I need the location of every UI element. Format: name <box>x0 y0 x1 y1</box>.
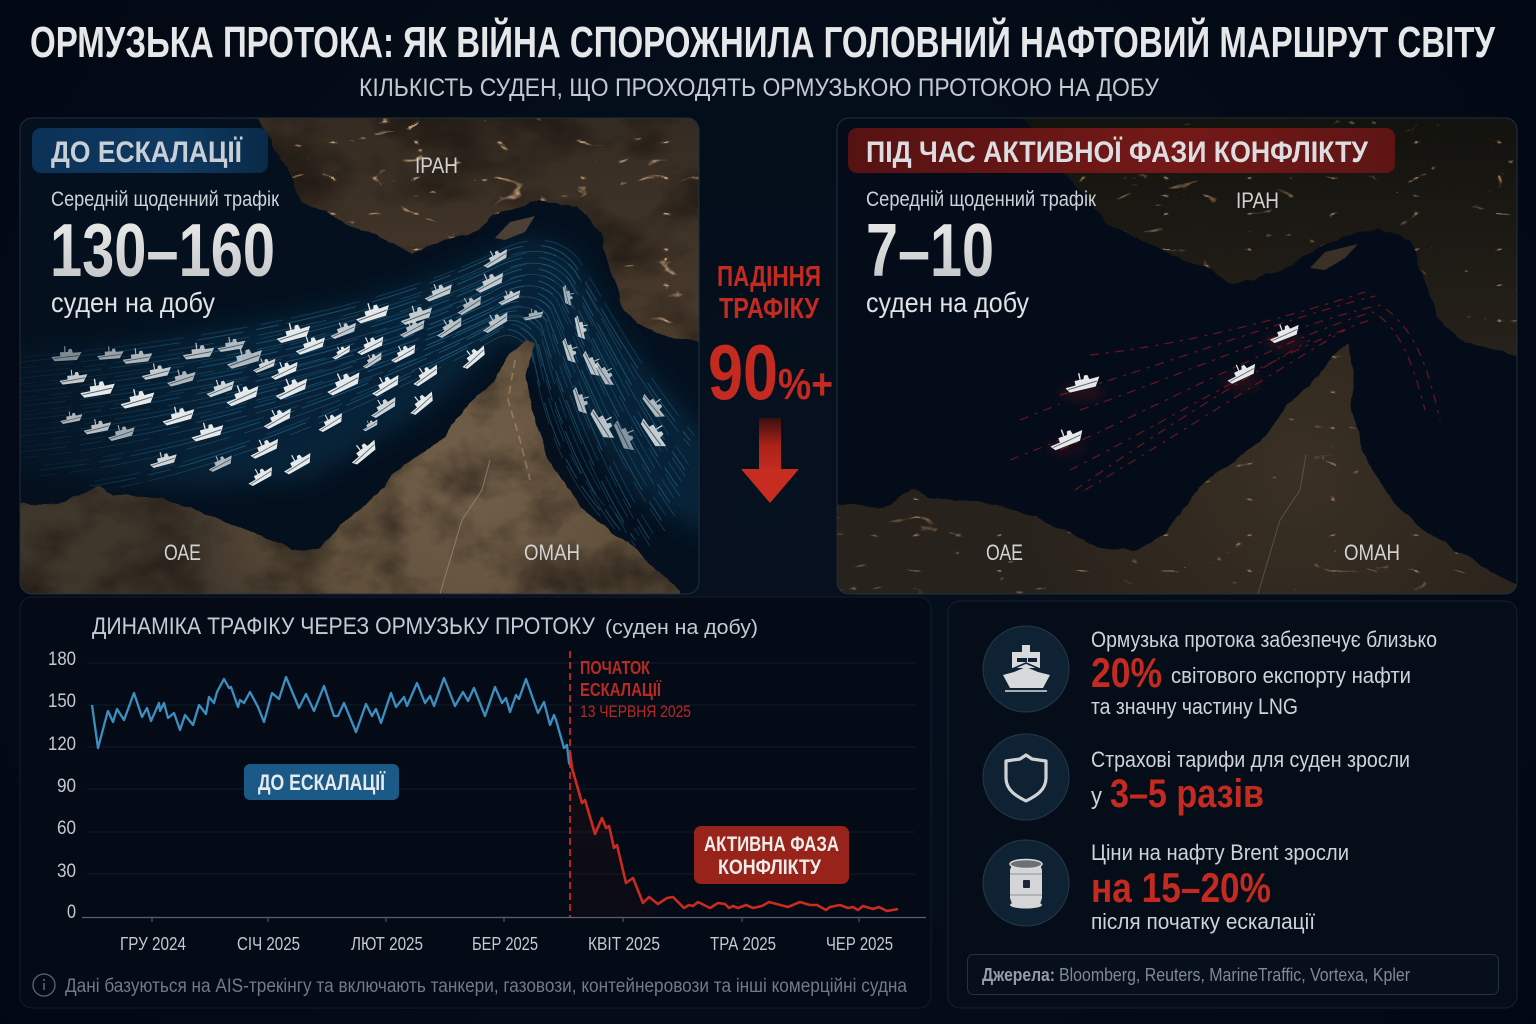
line: active phase <box>570 752 898 911</box>
fact text <box>1091 747 1410 816</box>
panel: active conflict map <box>820 110 1530 610</box>
panel: before escalation map <box>0 110 720 610</box>
map labels: ІРАН <box>1236 188 1279 213</box>
map labels <box>986 188 1400 565</box>
fact text: світового експорту нафти <box>1171 663 1411 688</box>
map labels <box>164 153 580 565</box>
stat: before escalation traffic: 130–160 <box>50 208 275 292</box>
fact text <box>1091 627 1437 719</box>
ships: dense traffic <box>51 244 673 487</box>
stat: active conflict traffic: суден на добу <box>866 287 1029 318</box>
y axis labels: 30 <box>57 861 76 882</box>
x axis labels: СІЧ 2025 <box>237 934 300 954</box>
x axis labels: БЕР 2025 <box>472 934 538 954</box>
fact text: та значну частину LNG <box>1091 694 1298 719</box>
map labels: ОМАН <box>1344 540 1400 565</box>
x axis labels <box>120 934 893 954</box>
y axis labels <box>48 649 76 923</box>
stat: active conflict traffic: Середній щоденний трафік <box>866 188 1097 211</box>
callout: traffic drop: %+ <box>778 360 833 409</box>
fact text: Ормузька протока забезпечує близько <box>1091 627 1437 652</box>
chart label: before escalation <box>244 764 399 800</box>
icon: shield <box>983 734 1069 820</box>
arrow: down <box>741 418 799 503</box>
map labels: ІРАН <box>415 153 458 178</box>
badge: before escalation: ДО ЕСКАЛАЦІЇ <box>51 136 243 169</box>
x axis labels: ГРУ 2024 <box>120 934 186 954</box>
x axis labels: ЛЮТ 2025 <box>351 934 423 954</box>
line: before escalation <box>92 677 572 768</box>
fact text: Страхові тарифи для суден зросли <box>1091 747 1410 772</box>
x axis labels: ТРА 2025 <box>710 934 776 954</box>
fact: insurance <box>983 734 1410 820</box>
map labels: ОМАН <box>524 540 580 565</box>
badge: active conflict phase: ПІД ЧАС АКТИВНОЇ ФАЗИ КОНФЛІКТУ <box>866 136 1368 169</box>
area under decline <box>570 750 658 917</box>
x axis labels: КВІТ 2025 <box>588 934 660 954</box>
fact text: у <box>1091 783 1102 810</box>
badge: active conflict phase <box>848 128 1395 173</box>
chart heading: ДИНАМІКА ТРАФІКУ ЧЕРЕЗ ОРМУЗЬКУ ПРОТОКУ <box>92 613 596 640</box>
callout: traffic drop: 90 <box>708 328 778 416</box>
y axis labels: 0 <box>67 902 76 923</box>
ships: few remaining <box>1046 319 1302 451</box>
chart label: active phase: КОНФЛІКТУ <box>718 856 822 879</box>
fact text: після початку ескалації <box>1091 909 1315 934</box>
stat: before escalation traffic: Середній щоденний трафік <box>51 188 280 211</box>
fact text: 3–5 разів <box>1110 772 1264 816</box>
map labels: ОАЕ <box>164 540 201 565</box>
marker: escalation start <box>569 651 571 917</box>
callout: traffic drop: ТРАФІКУ <box>719 293 820 325</box>
fact: oil prices <box>983 840 1349 934</box>
sources box <box>968 954 1498 994</box>
fact text: 20% <box>1091 649 1162 696</box>
annotation: escalation start: 13 ЧЕРВНЯ 2025 <box>580 702 691 721</box>
y axis labels: 180 <box>48 649 76 670</box>
chart heading: (суден на добу) <box>605 617 758 639</box>
callout: traffic drop: ПАДІННЯ <box>717 261 821 293</box>
y axis labels: 120 <box>48 734 76 755</box>
icon: info <box>33 974 55 996</box>
stat: before escalation traffic: суден на добу <box>51 287 215 318</box>
fact text <box>1091 840 1349 934</box>
y axis labels: 90 <box>57 776 76 797</box>
red route trails <box>1010 292 1440 490</box>
y axis labels: 150 <box>48 691 76 712</box>
chart label: active phase: АКТИВНА ФАЗА <box>704 833 839 856</box>
subtitle: КІЛЬКІСТЬ СУДЕН, ЩО ПРОХОДЯТЬ ОРМУЗЬКОЮ ПРОТОКОЮ НА ДОБУ <box>359 74 1159 102</box>
chart label: active phase <box>694 826 849 884</box>
chart label: before escalation: ДО ЕСКАЛАЦІЇ <box>258 770 386 795</box>
stat: active conflict traffic <box>866 188 1097 318</box>
note: Дані базуються на AIS-трекінгу та включають танкери, газовози, контейнеровози та інші комерційні судна <box>65 976 907 997</box>
stat: before escalation traffic <box>50 188 280 318</box>
callout: traffic drop <box>708 261 833 503</box>
fact text: на 15–20% <box>1091 864 1271 911</box>
stat: active conflict traffic: 7–10 <box>866 208 994 292</box>
icon: ship <box>983 626 1069 712</box>
panel: key facts <box>948 601 1517 1008</box>
badge: before escalation <box>32 128 268 173</box>
x axis labels: ЧЕР 2025 <box>826 934 893 954</box>
fact text: Ціни на нафту Brent зросли <box>1091 840 1349 865</box>
sources box: Bloomberg, Reuters, MarineTraffic, Vortexa, Kpler <box>1059 965 1410 985</box>
panel: traffic dynamics chart <box>20 597 931 1008</box>
icon: barrel <box>983 840 1069 926</box>
annotation: escalation start: ЕСКАЛАЦІЇ <box>580 680 662 700</box>
fact: oil export <box>983 626 1437 719</box>
sources box: Джерела: <box>982 965 1055 985</box>
y axis labels: 60 <box>57 818 76 839</box>
map labels: ОАЕ <box>986 540 1023 565</box>
annotation: escalation start: ПОЧАТОК <box>580 658 651 678</box>
annotation: escalation start <box>580 658 691 721</box>
